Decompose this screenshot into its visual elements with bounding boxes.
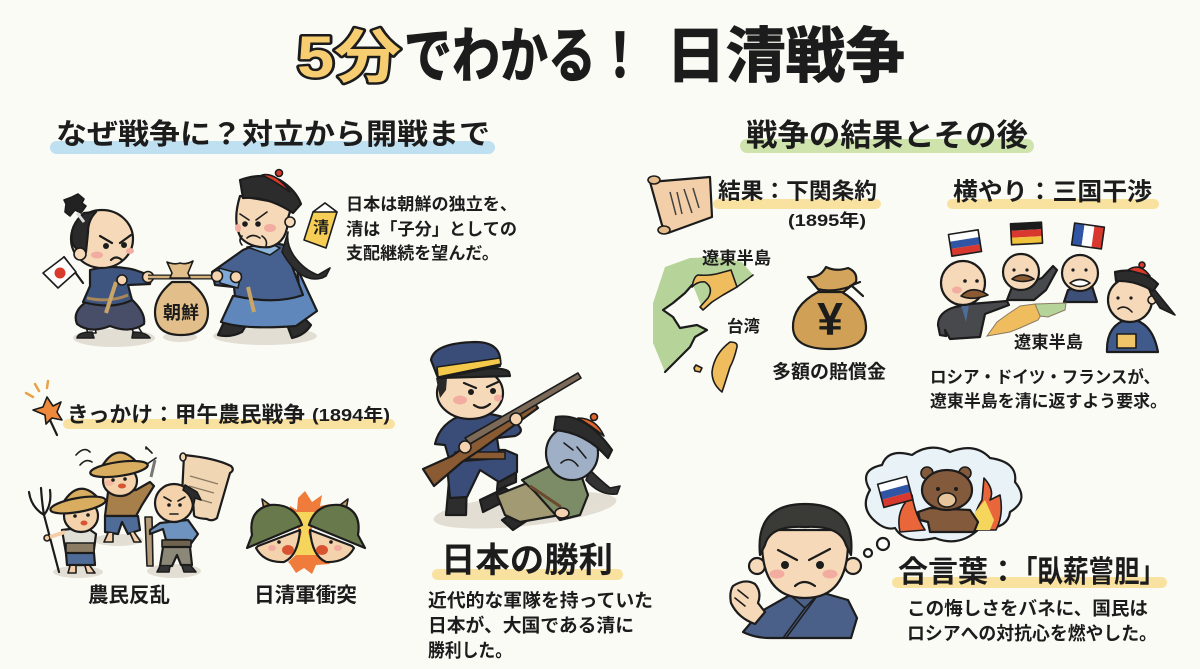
heading: Shimonoseki treaty <box>713 179 881 230</box>
icon: treaty scroll <box>648 176 712 234</box>
text: slogan explanation: この悔しさをバネに、国民は <box>907 598 1148 619</box>
title <box>297 23 905 90</box>
text: background of conflict: 支配継続を望んだ。 <box>346 243 499 263</box>
thought bubble <box>864 448 1021 557</box>
figure: French diplomat <box>1062 255 1098 302</box>
text: background of conflict: 清は「子分」としての <box>346 220 517 239</box>
label: Liaodong: 遼東半島 <box>702 249 771 268</box>
text: victory explanation <box>428 590 653 661</box>
figure: Qing official <box>1107 262 1175 352</box>
illustration: tug of war over Korea <box>43 170 337 347</box>
heading: trigger: きっかけ：甲午農民戦争 <box>67 403 305 427</box>
icon: rope <box>148 274 222 280</box>
figure: Russian diplomat <box>938 261 1009 339</box>
icon: rifle <box>423 373 581 486</box>
text: victory explanation: 日本が、大国である清に <box>428 615 634 636</box>
heading: Shimonoseki treaty: (1895年) <box>788 210 866 230</box>
icon: sack labelled Korea <box>148 261 222 335</box>
text: Triple Intervention explanation <box>930 367 1167 411</box>
illustration: peasants' revolt <box>29 447 233 578</box>
title: 5分 <box>297 25 401 90</box>
illustration: clash of armies <box>247 491 365 574</box>
label: Taiwan: 台湾 <box>727 316 760 336</box>
icon: money bag with yen <box>793 267 866 349</box>
title: 日清戦争 <box>666 23 905 90</box>
text: background of conflict: 日本は朝鮮の独立を、 <box>346 194 517 214</box>
heading: results: 戦争の結果とその後 <box>746 118 1028 153</box>
icon: flames <box>899 478 1001 532</box>
caption: large indemnity: 多額の賠償金 <box>772 361 886 383</box>
icon: Japanese flag <box>43 257 83 288</box>
heading: trigger: (1894年) <box>312 405 390 425</box>
icon: petition scroll <box>180 453 233 520</box>
figure: defeated Qing soldier <box>480 414 620 530</box>
text: Triple Intervention explanation: 遼東半島を清に返すよう要求。 <box>930 391 1167 411</box>
heading: slogan: 「臥薪嘗胆」 <box>1012 556 1165 589</box>
text: victory explanation: 勝利した。 <box>428 640 512 661</box>
icon: sack labelled Korea: 朝鮮 <box>163 303 199 323</box>
map: ceded territories <box>653 249 771 392</box>
icon: right helmet <box>309 499 365 562</box>
figure: peasant with stick <box>145 484 201 572</box>
figure: German diplomat <box>1003 254 1057 300</box>
icon: Qing pennant: 清 <box>313 219 329 237</box>
label: Liaodong: 遼東半島 <box>1014 333 1083 352</box>
icon: pitchfork <box>29 488 59 572</box>
figure: Russian bear <box>918 467 978 532</box>
icon: German flag <box>1010 222 1043 245</box>
icon: French flag <box>1072 223 1104 249</box>
icon: left helmet <box>247 499 302 562</box>
heading: Shimonoseki treaty: 結果：下関条約 <box>718 179 877 204</box>
figure: Japanese samurai <box>64 194 154 338</box>
heading: triple intervention: 横やり：三国干渉 <box>953 178 1153 206</box>
icon: Qing pennant <box>304 203 337 248</box>
icon: Russian flag <box>948 230 982 256</box>
caption: peasant revolt: 農民反乱 <box>88 584 170 607</box>
region: Liaodong peninsula <box>692 270 737 310</box>
illustration: Japanese soldier and defeated Qing soldier <box>423 342 620 536</box>
illustration: resentful citizen thinking of Russia <box>730 448 1021 638</box>
text: slogan explanation: ロシアへの対抗心を燃やした。 <box>907 623 1157 644</box>
icon: money bag with yen: ¥ <box>817 293 843 345</box>
region: Taiwan <box>712 342 737 392</box>
figure: peasant with pitchfork <box>44 489 107 573</box>
heading: Japan's victory: 日本の勝利 <box>441 542 613 580</box>
caption: army clash: 日清軍衝突 <box>254 584 357 607</box>
figure: Qing official <box>212 170 330 338</box>
heading: trigger <box>63 403 395 429</box>
title: でわかる！ <box>404 23 644 90</box>
heading: slogan: 合言葉： <box>898 556 1018 589</box>
text: slogan explanation <box>907 598 1157 644</box>
figure: peasant with sickle <box>76 447 156 542</box>
heading: causes: なぜ戦争に？対立から開戦まで <box>56 118 490 151</box>
icon: explosion <box>288 491 330 574</box>
figure: angry man <box>730 504 861 638</box>
illustration: Triple Intervention <box>938 222 1175 352</box>
region: small islands <box>694 365 702 372</box>
map: Liaodong peninsula <box>987 303 1066 336</box>
heading: slogan <box>892 556 1167 589</box>
icon: spark <box>26 381 62 435</box>
figure: Japanese soldier <box>431 342 521 515</box>
text: background of conflict <box>346 194 517 263</box>
text: Triple Intervention explanation: ロシア・ドイツ・フランスが、 <box>930 367 1160 387</box>
icon: Russian flag <box>878 476 913 507</box>
text: victory explanation: 近代的な軍隊を持っていた <box>428 590 653 611</box>
